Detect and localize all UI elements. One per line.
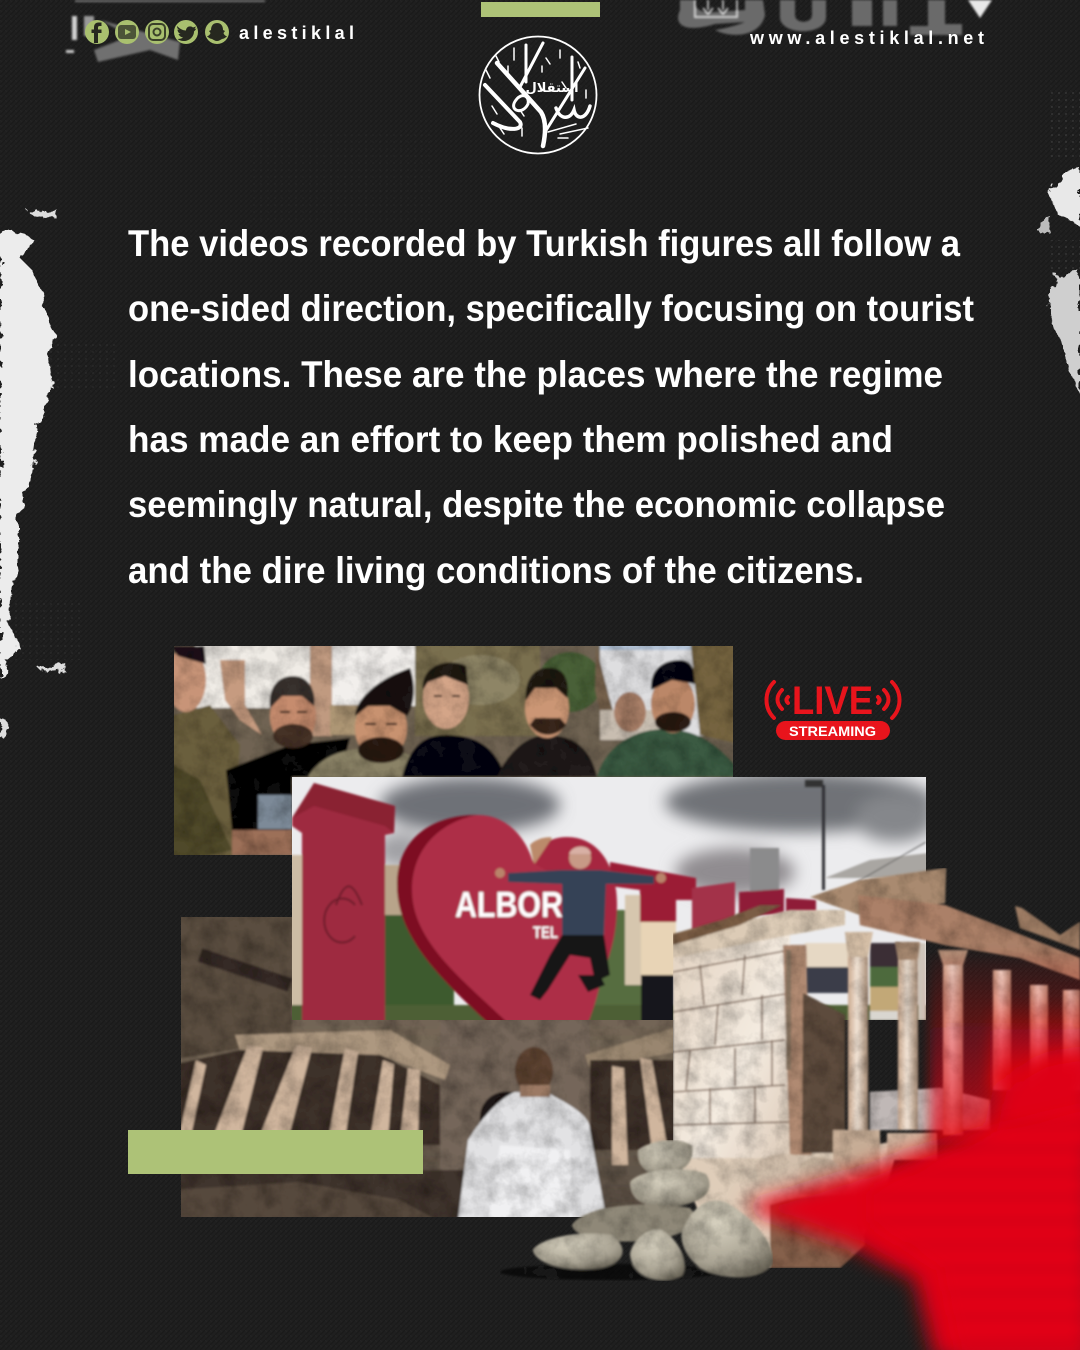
- main paragraph: seemingly natural, despite the economic collapse: [128, 484, 945, 525]
- photo: man jumping at I love sign: [286, 772, 936, 1030]
- distressed print: top left: [66, 0, 265, 62]
- live streaming badge: [766, 679, 900, 740]
- doorway pilaster: [783, 945, 812, 1155]
- logo: calligraphy roundel: استقلال: [525, 81, 579, 96]
- man in white shirt: [457, 1047, 608, 1227]
- green accent bar: [128, 1130, 423, 1174]
- column 3: [938, 950, 968, 1135]
- large stones: [755, 1154, 810, 1190]
- jumping man: [495, 846, 666, 1000]
- rock shadow: [500, 1264, 720, 1280]
- icon: facebook: [85, 20, 109, 44]
- red tint over colonnade: [930, 955, 1080, 1145]
- masonry wall: [673, 905, 845, 1158]
- person second: [226, 676, 350, 830]
- logo: calligraphy roundel: [480, 36, 596, 154]
- person far left: [174, 646, 292, 855]
- streaming pill: [776, 721, 890, 740]
- rock pile: [500, 1140, 773, 1281]
- column 1: [833, 932, 880, 1177]
- heart sign: [397, 815, 617, 1030]
- icon: youtube: [115, 20, 139, 44]
- person fourth: [402, 662, 505, 777]
- website url: www.alestiklal.net: [749, 28, 984, 48]
- heart sign: ALBOR: [455, 884, 563, 925]
- main paragraph: one-sided direction, specifically focusing on tourist: [128, 288, 974, 329]
- main paragraph: and the dire living conditions of the citizens.: [128, 550, 864, 591]
- column 5: [1030, 985, 1048, 1095]
- live text: LIVE: [792, 679, 873, 723]
- column 4: [993, 970, 1011, 1090]
- column 2: [887, 942, 937, 1160]
- icon: twitter: [174, 20, 198, 44]
- torn paper edge: right: [1040, 168, 1080, 398]
- red light stripes: [870, 1105, 1080, 1350]
- icon: instagram: [145, 20, 169, 44]
- red light smear: [745, 1050, 1080, 1350]
- red structures: [610, 862, 816, 1030]
- social media icons: [85, 20, 229, 44]
- column 6: [1063, 990, 1080, 1090]
- person sixth: [596, 646, 733, 777]
- brand handle: alestiklal: [239, 23, 354, 43]
- I letter: [292, 783, 395, 1030]
- heart sign: TEL: [533, 923, 558, 942]
- signal waves: [766, 682, 900, 718]
- torn paper edge: left: [0, 210, 66, 738]
- background through colonnade: [805, 943, 926, 1020]
- red glow above smear: [990, 1000, 1080, 1090]
- ground and rubble: [673, 1140, 900, 1268]
- main paragraph: has made an effort to keep them polished and: [128, 419, 893, 460]
- main paragraph: locations. These are the places where the regime: [128, 354, 943, 395]
- broken masonry in opening: [802, 993, 845, 1153]
- main paragraph: [128, 223, 974, 591]
- person fifth: [497, 668, 597, 777]
- speckled halftone patches: [10, 90, 1080, 660]
- distressed print: top right: [678, 0, 992, 35]
- upper entablature: [810, 868, 946, 915]
- snow ground: [870, 1088, 990, 1130]
- photo: man facing Roman theatre: [171, 907, 683, 1227]
- photo: group of soldiers: [174, 646, 733, 855]
- main paragraph: The videos recorded by Turkish figures all follow a: [128, 223, 960, 264]
- ruins: Roman colonnade: [673, 868, 1080, 1268]
- icon: snapchat: [205, 20, 229, 44]
- live streaming badge: STREAMING: [789, 723, 876, 739]
- top green tab: [481, 2, 600, 17]
- person third: [306, 667, 416, 777]
